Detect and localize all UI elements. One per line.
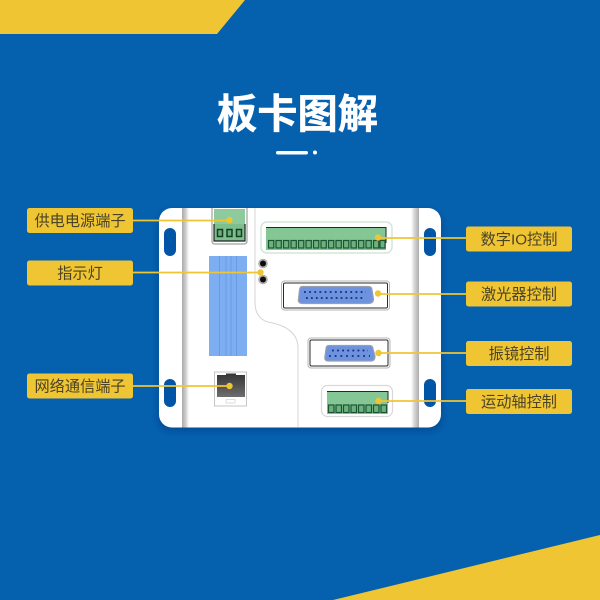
label: laser control <box>466 282 572 306</box>
label: galvo control <box>466 341 572 366</box>
bottom yellow banner <box>333 535 600 600</box>
label: digital IO control: 数字IO控制 <box>481 232 557 248</box>
label: motion axis control <box>466 389 572 414</box>
board <box>158 208 442 431</box>
digital IO terminal <box>261 222 392 253</box>
label: galvo control: 振镜控制 <box>489 345 549 363</box>
label: motion axis control: 运动轴控制 <box>481 394 557 411</box>
label: digital IO control <box>466 226 572 252</box>
title: 板卡图解 <box>217 92 378 137</box>
label: power terminal <box>27 208 133 233</box>
right bend strip <box>411 208 419 428</box>
indicator lights <box>258 259 268 284</box>
power terminal <box>212 208 247 244</box>
panel contour <box>255 208 298 427</box>
blue module block <box>209 256 247 356</box>
label: indicator light: 指示灯 <box>57 266 103 282</box>
galvo DB15 connector <box>308 338 390 368</box>
callout lines and dots <box>133 217 466 404</box>
top yellow banner <box>0 0 245 34</box>
title underline <box>276 150 317 154</box>
label: power terminal: 供电电源端子 <box>34 213 126 230</box>
laser DB25 connector <box>282 281 390 310</box>
label: network terminal <box>27 374 133 398</box>
label: indicator light <box>27 260 133 286</box>
mounting slots <box>164 228 436 407</box>
label: laser control: 激光器控制 <box>481 286 557 304</box>
motion axis terminal <box>322 386 392 416</box>
label: network terminal: 网络通信端子 <box>34 378 126 396</box>
left bend strip <box>182 208 189 428</box>
network port <box>214 372 246 406</box>
